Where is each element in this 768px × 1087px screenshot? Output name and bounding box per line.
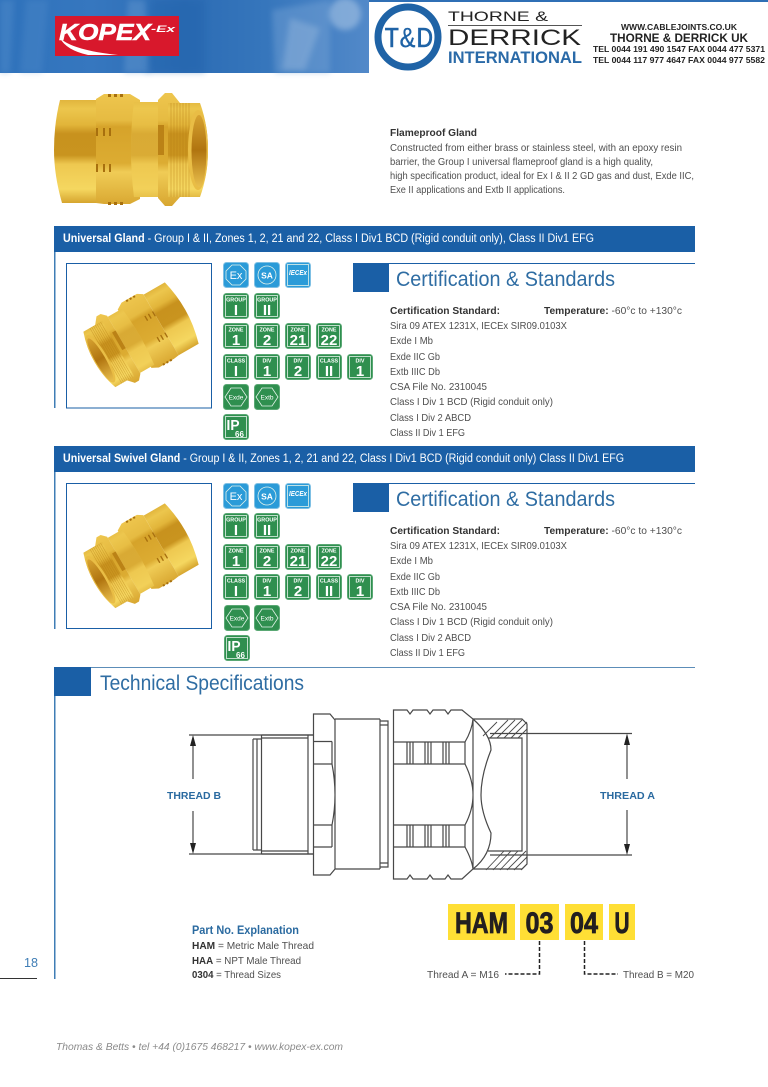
header banner: blue photo strip: [0, 0, 369, 73]
icon: Zone 21: [286, 544, 310, 570]
text block: part number explanation: Part No. Explanation: [192, 925, 299, 937]
panel: certification and standards, Universal Gland: Exde I Mb: [390, 335, 433, 347]
icon: IP66: IP: [226, 417, 240, 434]
page number: [0, 956, 38, 979]
icon: Div 1: 1: [263, 583, 271, 600]
icon: Class I: I: [234, 583, 238, 600]
icon: IP66: 66: [235, 430, 244, 439]
company name: DERRICK: [448, 25, 581, 50]
icon: Group I: [224, 514, 248, 539]
text block: part number explanation: [192, 925, 314, 981]
panel: certification and standards, Universal Swivel Gland: Extb IIIC Db: [390, 586, 440, 598]
panel: certification and standards, Universal Swivel Gland: Exde IIC Gb: [390, 571, 440, 583]
icon: Ex: Ex: [230, 491, 243, 503]
icon: Group I: I: [234, 522, 238, 539]
body and collar: [380, 719, 388, 869]
grooved nut: [394, 710, 473, 879]
panel: certification and standards, Universal Swivel Gland: Class I Div 2 ABCD: [390, 632, 471, 644]
panel: certification and standards, Universal Swivel Gland: Class II Div 1 EFG: [390, 647, 465, 659]
contact details: THORNE & DERRICK UK: [610, 31, 748, 45]
male thread end: [253, 735, 313, 854]
icon: Div 1: DIV: [262, 578, 272, 584]
part number diagram: U: [614, 907, 630, 940]
icon: Extb: [254, 606, 280, 630]
icon: Class I: [224, 574, 248, 600]
icon: IECEx: [286, 262, 310, 288]
part number diagram: Thread A = M16: [427, 969, 499, 981]
icon: Class II: [316, 574, 342, 600]
icon: Div 2: DIV: [294, 578, 303, 584]
icon: IECEx: [286, 484, 310, 508]
panel: certification and standards, Universal Gland: Temperature: -60°c to +130°c: [544, 305, 682, 317]
icon: IECEx: IECEx: [289, 489, 308, 498]
icon: Div 1: [254, 574, 280, 600]
icon: Class II: CLASS: [320, 358, 339, 364]
icon: Div 1 second: [348, 354, 372, 380]
icon: Ex: [224, 262, 248, 288]
panel: certification and standards, Universal Gland: Class I Div 1 BCD (Rigid conduit only): [390, 396, 553, 408]
text block: part number explanation: HAM = Metric Male Thread: [192, 940, 314, 952]
contact details: WWW.CABLEJOINTS.CO.UK: [621, 22, 738, 32]
icon: IECEx: IECEx: [289, 268, 308, 277]
technical drawing: gland cross-section: [167, 710, 655, 879]
icon: Zone 1: 1: [232, 553, 240, 570]
intro text: flameproof gland: high specification product, ideal for Ex I & II 2 GD gas and dust, Exde IIC,: [390, 170, 694, 182]
page number: 18: [24, 956, 38, 970]
icon: Zone 2: 2: [263, 332, 271, 349]
icon: Zone 1: [224, 544, 248, 570]
icon: Group I: GROUP: [226, 518, 246, 524]
hatching: [483, 720, 527, 870]
heading: Technical Specifications: Technical Specifications: [100, 671, 304, 695]
logo: T&D roundel: [378, 7, 438, 67]
icon: IP66: 66: [236, 651, 245, 660]
section band: Universal Swivel Gland: Universal Swivel Gland - Group I & II, Zones 1, 2, 21 and 22, Class I Div1 BCD (Rigid conduit only) Class II Div1 EFG: [63, 453, 624, 465]
icon: Div 1 second: DIV: [356, 578, 365, 584]
icon: IP66: [224, 414, 248, 440]
panel: certification and standards, Universal Swivel Gland: CSA File No. 2310045: [390, 601, 487, 613]
part number diagram: [427, 904, 694, 981]
contact details: TEL 0044 117 977 4647 FAX 0044 977 5582: [593, 55, 765, 65]
company name: THORNE &: [448, 8, 549, 24]
hex nut: [314, 714, 380, 875]
icon: Class II: II: [325, 363, 333, 380]
icon: Class II: [316, 354, 342, 380]
panel: certification and standards, Universal Swivel Gland: Class I Div 1 BCD (Rigid conduit only): [390, 616, 553, 628]
icon: Div 1 second: 1: [356, 363, 364, 380]
icon: Class I: CLASS: [227, 578, 246, 584]
icon: Exde: Exde: [230, 616, 245, 622]
logo: Kopex-Ex: [55, 16, 179, 56]
dimension: thread B: [167, 735, 313, 854]
icon: Div 1 second: DIV: [356, 358, 365, 364]
product image box: Universal Gland: [66, 264, 212, 408]
icon: Zone 21: 21: [290, 553, 306, 570]
dimension: thread B: THREAD B: [167, 790, 221, 802]
part number diagram: Thread B = M20: [623, 969, 694, 981]
logo: Kopex-Ex: -Ex: [151, 24, 176, 35]
certification icons: Universal Gland: [224, 262, 372, 440]
panel: certification and standards, Universal Swivel Gland: Exde I Mb: [390, 555, 433, 567]
part number diagram: 03: [526, 907, 554, 940]
panel: certification and standards, Universal Swivel Gland: [353, 483, 695, 659]
section band: Universal Gland: [54, 226, 695, 408]
icon: Zone 21: [286, 324, 310, 349]
section band: Universal Gland: Universal Gland - Group I & II, Zones 1, 2, 21 and 22, Class I Div1 BCD (Rigid conduit only), Class II Div1 EFG: [63, 233, 594, 245]
icon: Zone 22: ZONE: [322, 328, 337, 334]
panel: certification and standards, Universal Gland: Exde IIC Gb: [390, 351, 440, 363]
icon: Exde: Exde: [229, 394, 244, 402]
icon: Div 1: 1: [263, 363, 271, 380]
icon: Group II: [254, 514, 280, 539]
panel: certification and standards, Universal Gland: Certification Standard:: [390, 305, 500, 317]
icon: Group I: [224, 294, 248, 319]
icon: Div 2: DIV: [294, 358, 303, 364]
icon: Group I: I: [234, 302, 238, 319]
icon: Class II: II: [325, 583, 333, 600]
icon: Group II: GROUP: [257, 298, 277, 304]
panel: certification and standards, Universal Swivel Gland: Certification Standard:: [390, 525, 500, 537]
icon: IP66: [224, 636, 250, 660]
icon: Zone 1: [224, 324, 248, 349]
dimension: thread A: THREAD A: [600, 790, 655, 802]
icon: IP66: IP: [228, 638, 240, 655]
icon: Class II: CLASS: [320, 578, 339, 584]
intro text: flameproof gland: Flameproof Gland: [390, 127, 477, 139]
icon: Zone 22: 22: [321, 553, 337, 570]
icon: Zone 22: 22: [321, 332, 337, 349]
panel: certification and standards, Universal Gland: Extb IIIC Db: [390, 366, 440, 378]
icon: Zone 21: ZONE: [291, 328, 306, 334]
icon: Div 2: 2: [294, 583, 302, 600]
icon: Zone 2: [254, 324, 280, 349]
panel: certification and standards, Universal Swivel Gland: Temperature: -60°c to +130°c: [544, 525, 682, 537]
icon: Zone 22: [316, 324, 342, 349]
section band: Universal Swivel Gland: [54, 446, 695, 629]
panel: certification and standards, Universal Gland: Sira 09 ATEX 1231X, IECEx SIR09.0103X: [390, 320, 567, 332]
icon: Extb: Extb: [260, 394, 274, 402]
icon: Group I: GROUP: [226, 298, 246, 304]
product image box: Universal Swivel Gland: [66, 484, 212, 628]
icon: Div 1 second: [348, 574, 372, 600]
intro text: flameproof gland: barrier, the Group I universal flameproof gland is a high quality,: [390, 156, 653, 168]
icon: Exde: [224, 384, 248, 410]
icon: Zone 2: ZONE: [260, 328, 275, 334]
panel: certification and standards, Universal Gland: [353, 263, 695, 439]
icon: Class I: [224, 354, 248, 380]
panel: certification and standards, Universal Swivel Gland: Sira 09 ATEX 1231X, IECEx SIR09.0103X: [390, 540, 567, 552]
part number diagram: 04: [570, 907, 598, 940]
coupling end: [473, 719, 527, 869]
panel: certification and standards, Universal Swivel Gland: Certification & Standards: [396, 487, 615, 511]
icon: Zone 1: 1: [232, 332, 240, 349]
icon: Zone 1: ZONE: [229, 328, 244, 334]
certification icons: Universal Swivel Gland: [224, 484, 372, 660]
icon: Div 1: [254, 354, 280, 380]
icon: Div 2: [286, 574, 310, 600]
icon: Extb: Extb: [260, 616, 274, 622]
grooves: [407, 742, 449, 847]
photo: brass flameproof gland: [54, 93, 208, 206]
icon: Zone 21: ZONE: [291, 548, 306, 554]
header: Thorne & Derrick contact panel: [369, 0, 768, 73]
icon: Div 1: DIV: [262, 358, 272, 364]
company name: [448, 8, 582, 67]
icon: Exde: [224, 606, 250, 630]
icon: Zone 22: ZONE: [322, 548, 337, 554]
icon: Zone 2: ZONE: [260, 548, 275, 554]
footer: Thomas & Betts • tel +44 (0)1675 468217 • www.kopex-ex.com: [56, 1041, 343, 1053]
icon: Div 1 second: 1: [356, 583, 364, 600]
icon: Zone 2: [254, 544, 280, 570]
icon: Zone 22: [316, 544, 342, 570]
part number diagram: HAM: [455, 907, 508, 940]
panel: certification and standards, Universal Gland: Class II Div 1 EFG: [390, 427, 465, 439]
icon: Class I: I: [234, 363, 238, 380]
intro text: flameproof gland: [390, 127, 694, 196]
logo: T&D roundel: T&D: [384, 22, 434, 54]
icon: CSA: SA: [261, 270, 273, 280]
text block: part number explanation: HAA = NPT Male Thread: [192, 955, 301, 967]
intro text: flameproof gland: Exe II applications and Extb II applications.: [390, 184, 565, 196]
icon: Ex: Ex: [230, 270, 243, 282]
panel: certification and standards, Universal Gland: CSA File No. 2310045: [390, 381, 487, 393]
icon: Ex: [224, 484, 248, 508]
logo: Kopex-Ex: KOPEX: [59, 19, 153, 45]
icon: CSA: [254, 262, 280, 288]
icon: Group II: II: [263, 302, 271, 319]
icon: Zone 2: 2: [263, 553, 271, 570]
company name: INTERNATIONAL: [448, 49, 582, 67]
icon: Group II: II: [263, 522, 271, 539]
icon: Zone 21: 21: [290, 332, 306, 349]
heading: Technical Specifications: [54, 667, 695, 979]
panel: certification and standards, Universal Gland: Certification & Standards: [396, 267, 615, 291]
icon: Div 2: 2: [294, 363, 302, 380]
icon: Group II: [254, 294, 280, 319]
intro text: flameproof gland: Constructed from either brass or stainless steel, with an epoxy resin: [390, 142, 682, 154]
icon: CSA: SA: [261, 492, 273, 502]
panel: certification and standards, Universal Gland: Class I Div 2 ABCD: [390, 412, 471, 424]
text block: part number explanation: 0304 = Thread Sizes: [192, 969, 281, 981]
contact details: [593, 22, 765, 65]
icon: Group II: GROUP: [257, 518, 277, 524]
icon: Extb: [254, 384, 280, 410]
contact details: TEL 0044 191 490 1547 FAX 0044 477 5371: [593, 44, 765, 54]
icon: CSA: [254, 484, 280, 508]
icon: Zone 1: ZONE: [229, 548, 244, 554]
icon: Class I: CLASS: [227, 358, 246, 364]
dimension: thread A: [527, 734, 655, 855]
icon: Div 2: [286, 354, 310, 380]
